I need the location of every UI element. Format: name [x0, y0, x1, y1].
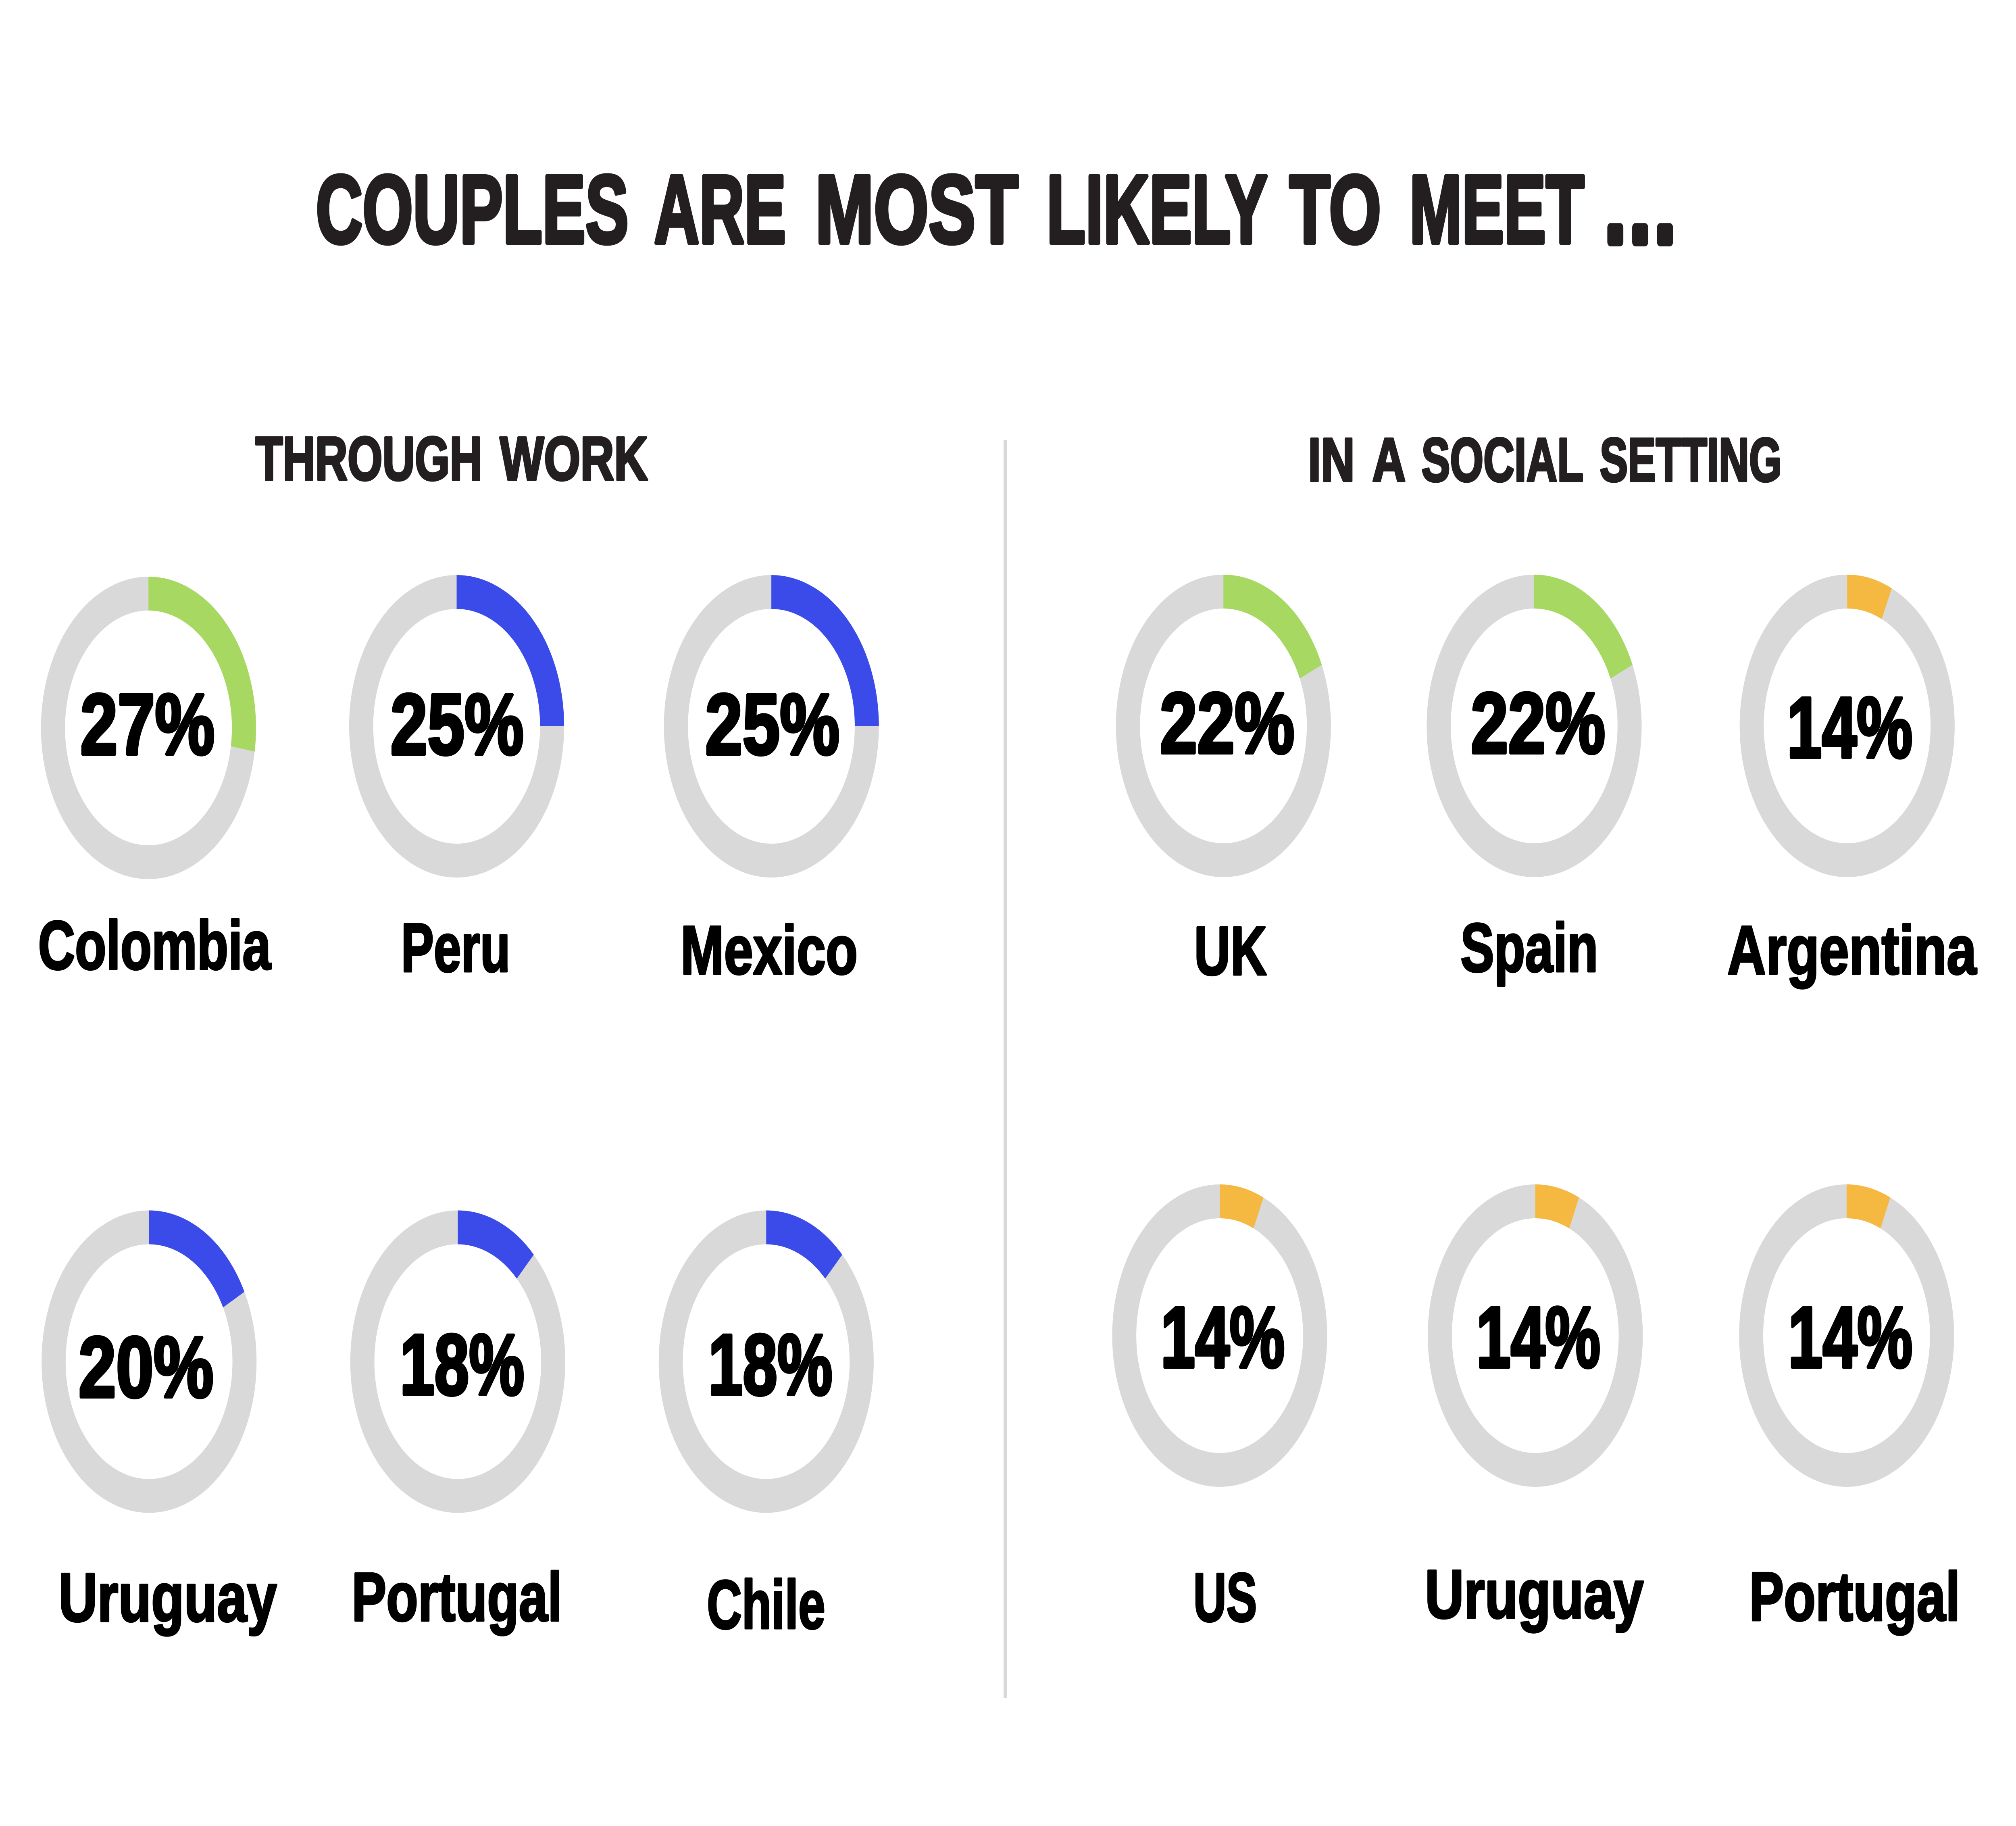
donut: UK 22% [1128, 592, 1319, 990]
donut: Chile 18% [671, 1228, 862, 1643]
donut: Uruguay 20% [54, 1228, 277, 1636]
title: ARE [654, 155, 786, 263]
donut: Portugal 18%: 18% [400, 1317, 524, 1413]
title: COUPLES [316, 155, 629, 263]
donut: Colombia 27%: 27% [80, 676, 215, 773]
donut: US 14%: 14% [1161, 1289, 1285, 1386]
donut: Colombia 27%: Colombia [38, 907, 271, 984]
donut: Peru 25%: Peru [401, 909, 510, 986]
donut: Uruguay 20%: 20% [79, 1319, 214, 1415]
donut: Portugal 18%: Portugal [352, 1559, 562, 1636]
donut: US 14%: US [1193, 1559, 1257, 1636]
donut: Chile 18%: Chile [707, 1566, 825, 1643]
donut: Portugal 14% [1749, 1201, 1960, 1635]
title: MOST [815, 155, 1018, 263]
title: ... [1606, 154, 1674, 263]
donut: Mexico 25%: 25% [705, 676, 839, 773]
donut: Spain 22%: 22% [1471, 675, 1605, 771]
donut: UK 22%: 22% [1160, 675, 1295, 771]
donut: Portugal 18% [352, 1228, 562, 1636]
divider [1004, 440, 1007, 1698]
panel: through work [38, 592, 867, 1643]
heading: in a social setting: A [1372, 425, 1406, 494]
donut: Peru 25%: 25% [390, 676, 524, 773]
donut: US 14% [1124, 1201, 1315, 1636]
donut: Argentina 14%: 14% [1787, 680, 1912, 776]
donut: Colombia 27% [38, 594, 271, 984]
heading: in a social setting: SETTING [1600, 425, 1782, 494]
donut: Portugal 14%: 14% [1788, 1289, 1912, 1386]
panel: in a social setting [1124, 592, 1977, 1636]
donut: Mexico 25% [676, 592, 867, 989]
title: TO [1289, 155, 1381, 263]
heading: through work: THROUGH [255, 424, 482, 493]
heading: through work [255, 424, 648, 493]
heading: in a social setting [1308, 425, 1782, 494]
donut: Uruguay 14% [1425, 1201, 1643, 1633]
title: MEET [1410, 155, 1584, 263]
donut: Uruguay 20%: Uruguay [58, 1559, 277, 1636]
heading: through work: WORK [500, 424, 648, 493]
donut: Portugal 14%: Portugal [1749, 1558, 1960, 1635]
heading: in a social setting: IN [1308, 425, 1355, 494]
donut: Uruguay 14%: 14% [1476, 1289, 1600, 1386]
donut: Peru 25% [361, 592, 552, 986]
donut: Uruguay 14%: Uruguay [1425, 1556, 1643, 1633]
title [316, 154, 1674, 263]
donut: Spain 22%: Spain [1460, 909, 1598, 986]
donut: UK 22%: UK [1194, 913, 1267, 990]
donut: Argentina 14% [1727, 592, 1977, 989]
donut: Mexico 25%: Mexico [681, 912, 858, 989]
title: LIKELY [1047, 155, 1268, 263]
heading: in a social setting: SOCIAL [1422, 425, 1583, 494]
donut: Chile 18%: 18% [708, 1317, 833, 1413]
donut: Spain 22% [1439, 592, 1630, 986]
donut: Argentina 14%: Argentina [1727, 912, 1977, 989]
